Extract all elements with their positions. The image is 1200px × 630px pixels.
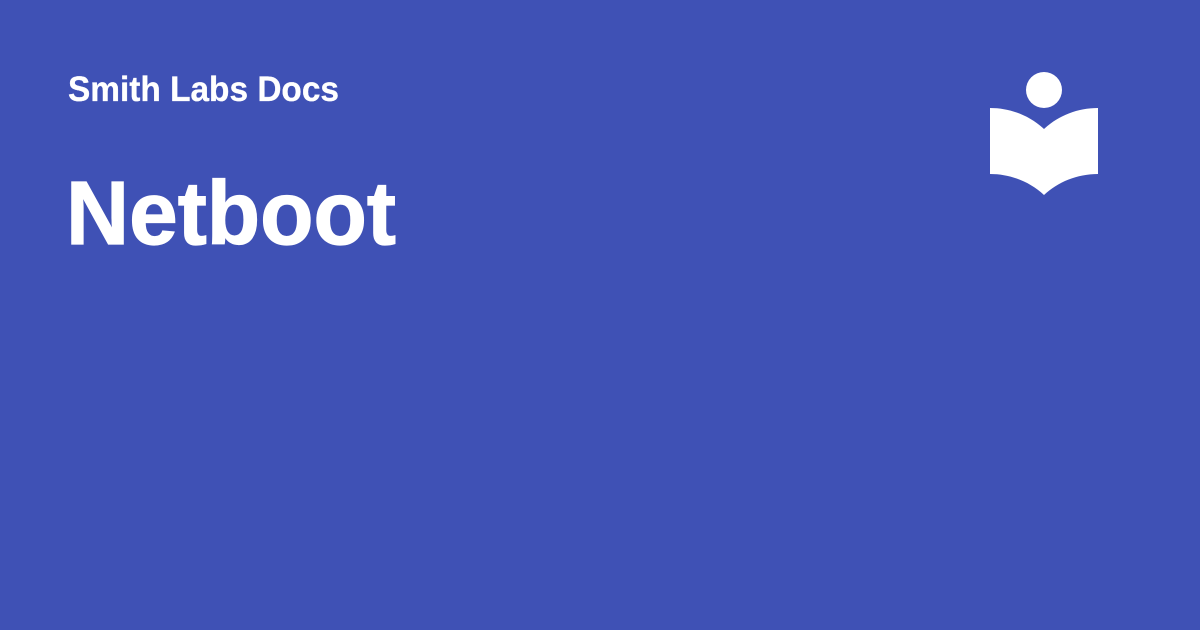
icon: book reader logo — [990, 72, 1098, 195]
page title: Netboot: Netboot — [66, 164, 396, 264]
site name: Smith Labs Docs — [68, 70, 339, 109]
